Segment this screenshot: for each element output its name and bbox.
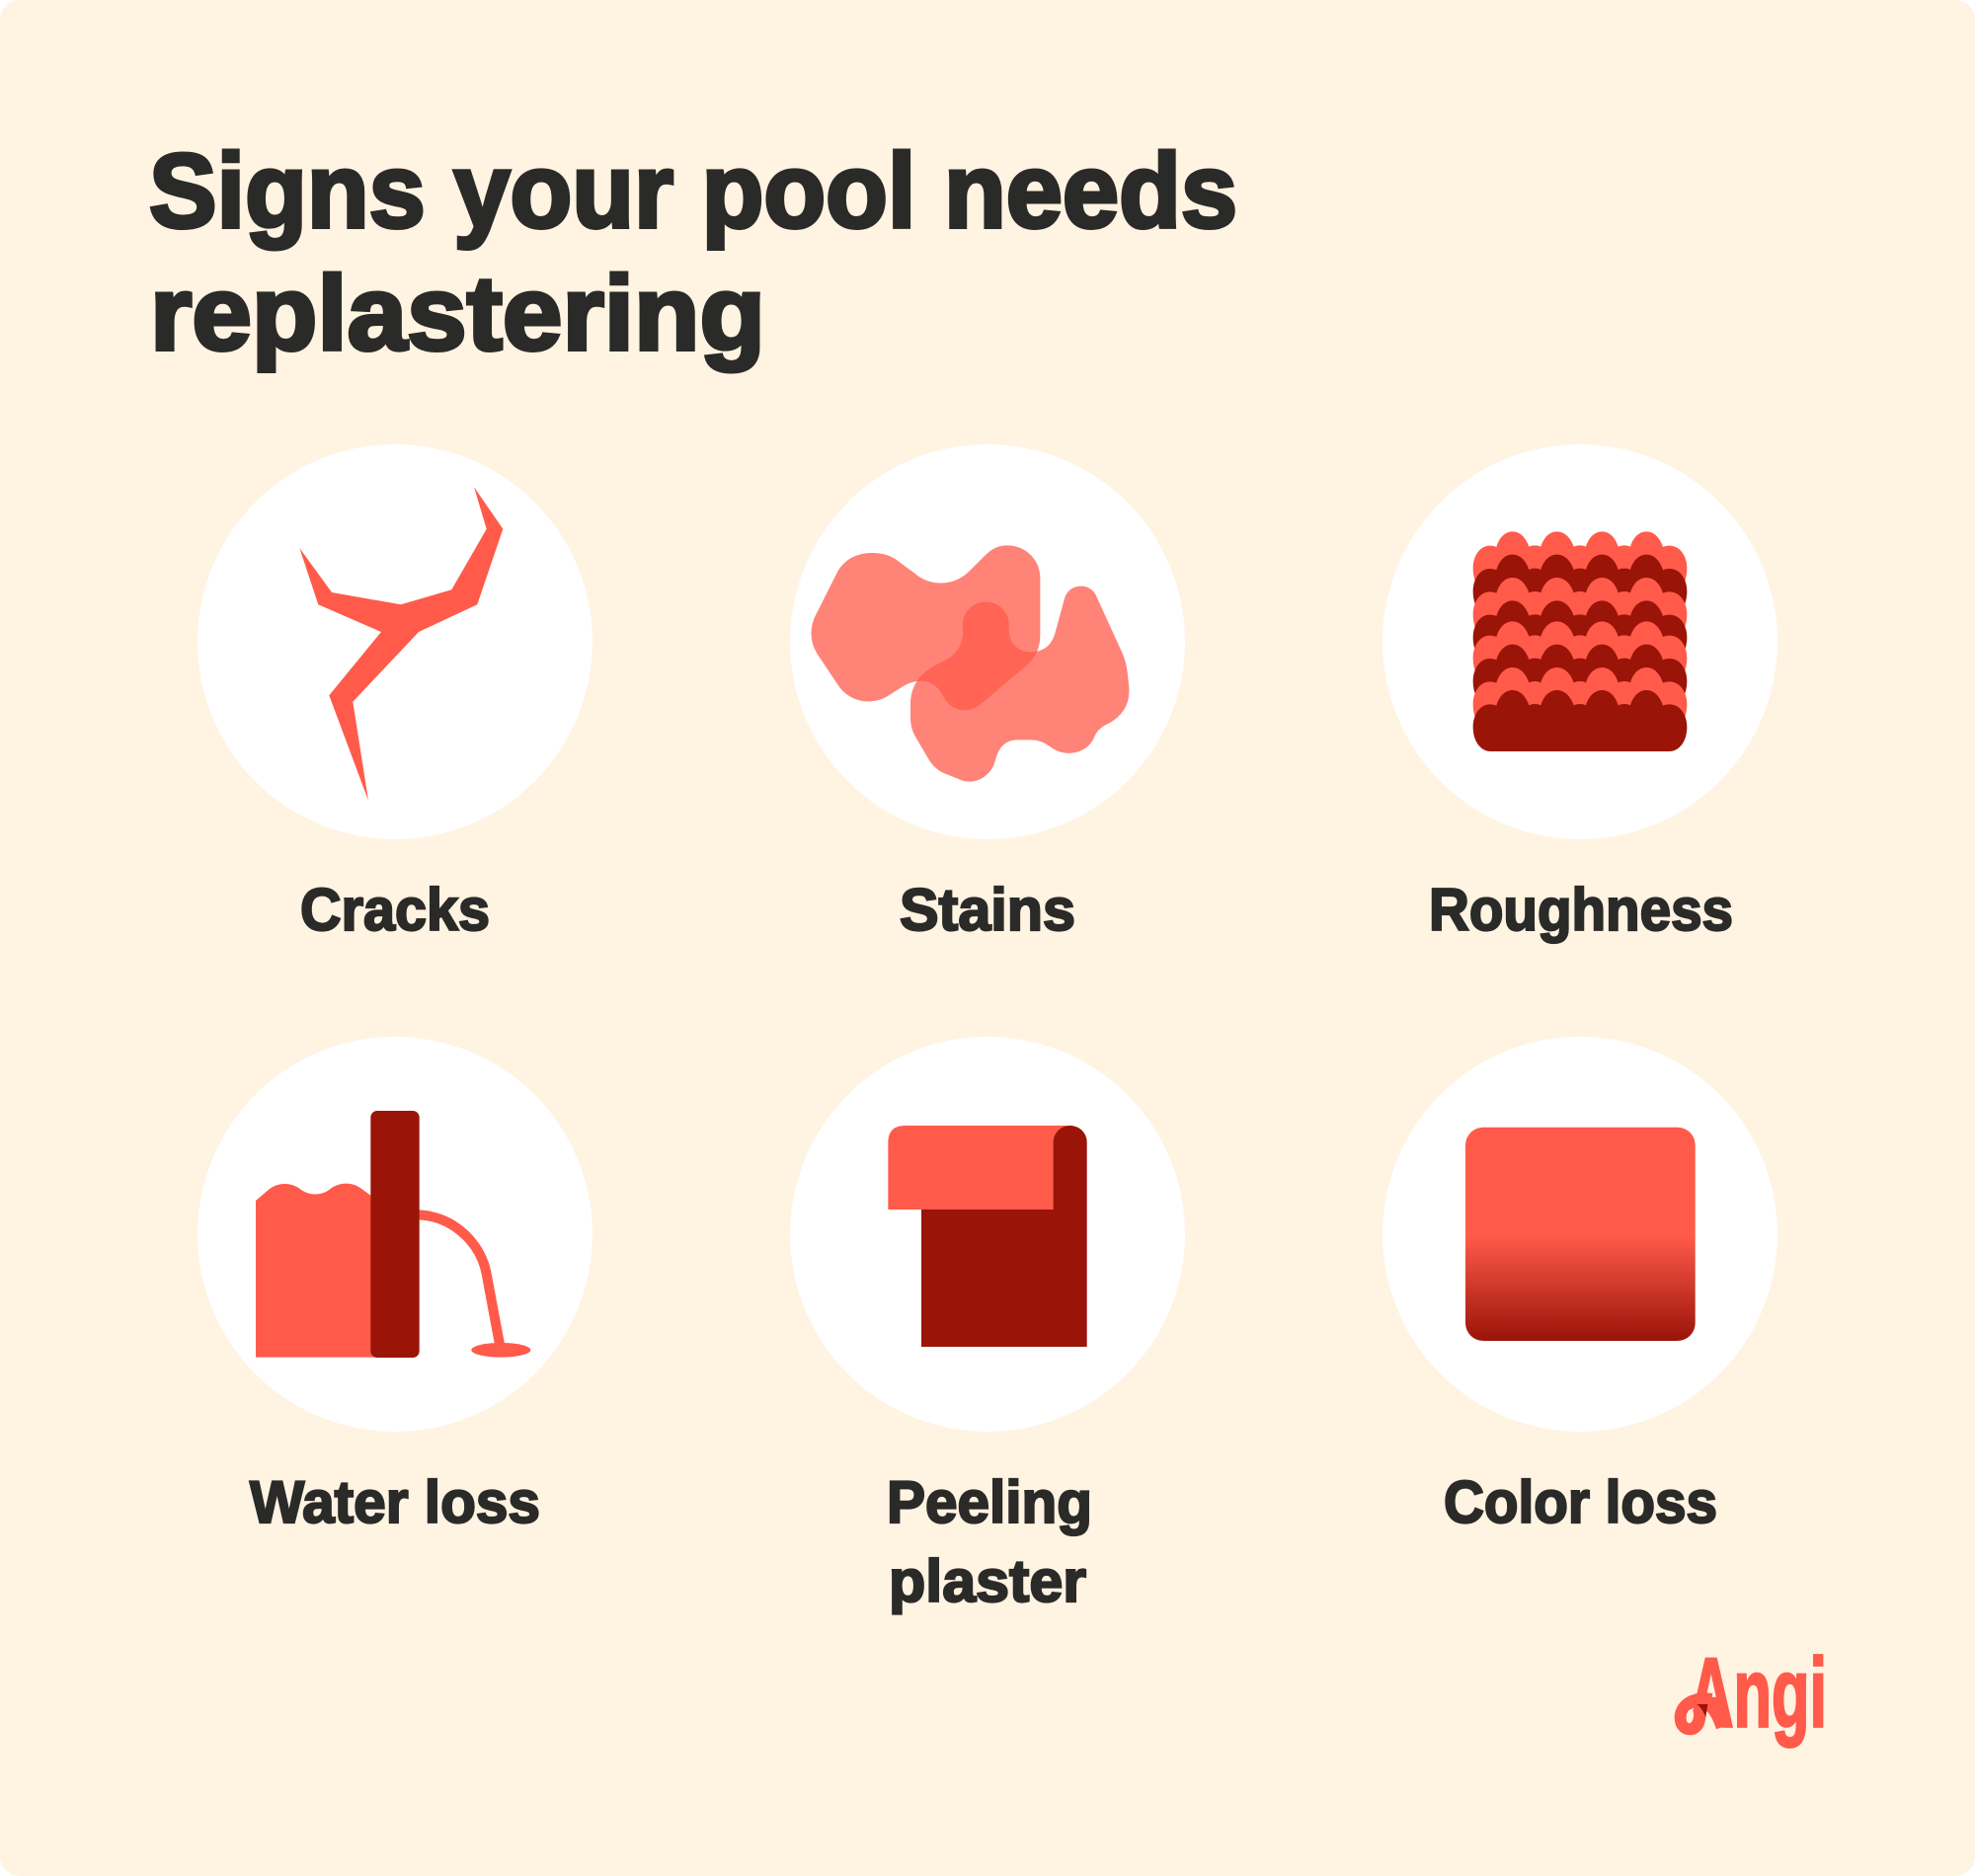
- icon: fading square: [1465, 1128, 1696, 1341]
- label: peeling plaster: plaster: [889, 1548, 1086, 1614]
- circle: color loss: [1382, 1037, 1778, 1432]
- label: stains: Stains: [900, 877, 1075, 943]
- panel: cracks: [198, 444, 592, 943]
- panel: water loss: [198, 1037, 592, 1535]
- icon: peeling sheet: [888, 1126, 1087, 1347]
- label: peeling plaster: [887, 1469, 1092, 1614]
- panel: stains: [790, 444, 1185, 943]
- label: cracks: Cracks: [300, 877, 490, 943]
- title: [149, 131, 1237, 372]
- panel: roughness: [1382, 444, 1778, 943]
- label: water loss: Water loss: [250, 1469, 540, 1535]
- icon: leaking wall: [256, 1111, 530, 1358]
- label: peeling plaster: Peeling: [887, 1469, 1092, 1535]
- circle: roughness: [1382, 444, 1778, 839]
- icon: rough surface: [1473, 531, 1687, 751]
- icon: stains: [812, 545, 1129, 782]
- logo: Angi: Angi: [1689, 1639, 1827, 1749]
- label: color loss: Color loss: [1444, 1469, 1717, 1535]
- circle: stains: [790, 444, 1185, 839]
- icon: crack: [299, 487, 503, 801]
- title: replastering: [150, 254, 765, 372]
- label: roughness: Roughness: [1429, 877, 1733, 943]
- panel: color loss: [1382, 1037, 1778, 1535]
- circle: peeling plaster: [790, 1037, 1185, 1432]
- panel: peeling plaster: [790, 1037, 1185, 1614]
- circle: cracks: [198, 444, 592, 839]
- title: Signs your pool needs: [149, 131, 1237, 250]
- circle: water loss: [198, 1037, 592, 1432]
- logo: Angi: [1681, 1639, 1827, 1749]
